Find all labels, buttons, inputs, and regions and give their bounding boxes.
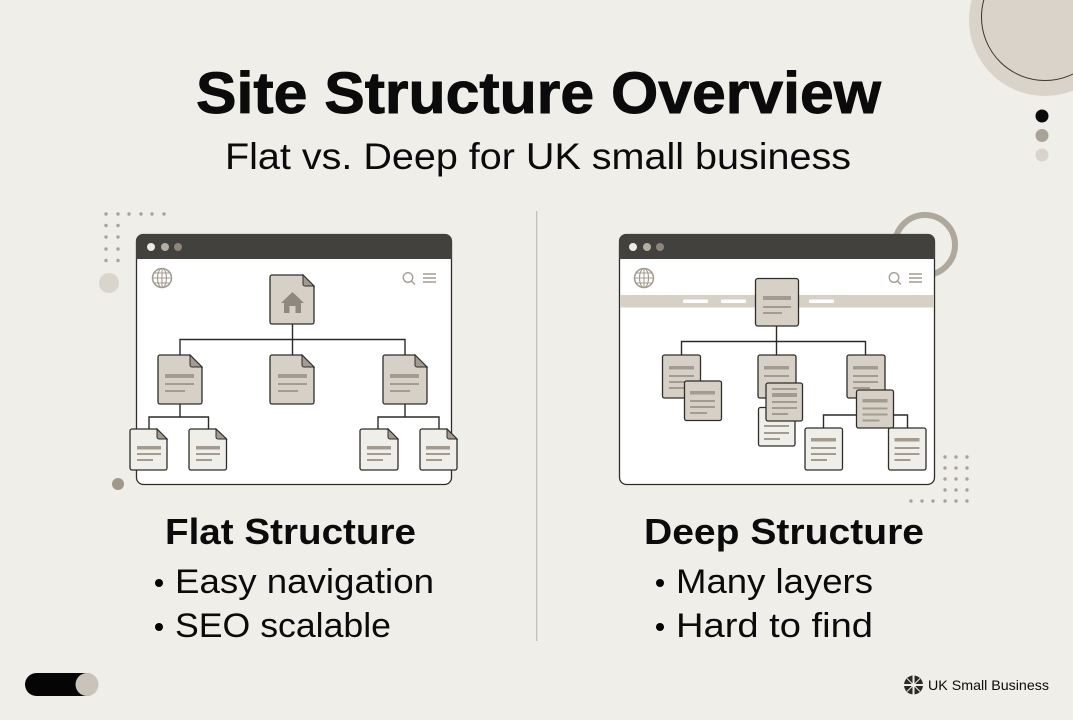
decorative ring right bbox=[895, 215, 955, 275]
icon: union flag badge bbox=[904, 676, 923, 694]
level 3 page left bbox=[805, 428, 842, 470]
page group left bbox=[662, 355, 722, 420]
level 3 page 2 bbox=[189, 429, 226, 470]
brand label: UK Small Business bbox=[928, 677, 1049, 693]
level 3 page right bbox=[888, 428, 926, 470]
navigation band bbox=[620, 295, 934, 308]
toggle switch bbox=[25, 673, 98, 696]
tree connectors bbox=[682, 326, 908, 428]
heading: deep structure: Deep Structure bbox=[644, 511, 924, 552]
panel: flat structure browser bbox=[130, 234, 457, 484]
top page bbox=[756, 278, 798, 326]
level 2 page left bbox=[158, 355, 202, 404]
level 3 page 4 bbox=[420, 429, 457, 470]
dot grid bottom right bbox=[909, 455, 969, 503]
browser window bbox=[620, 234, 934, 484]
centre divider bbox=[536, 211, 537, 641]
list: deep structure drawbacks bbox=[656, 563, 873, 645]
icon: search bbox=[403, 273, 415, 284]
subtitle: Flat vs. Deep for UK small business bbox=[225, 136, 851, 177]
decorative small circle left bbox=[112, 478, 124, 490]
decorative three dots top right bbox=[1036, 110, 1048, 162]
icon: globe bbox=[152, 268, 172, 288]
page group centre bbox=[758, 355, 802, 446]
dot grid top left bbox=[104, 212, 166, 262]
list: deep structure drawbacks: Many layers bbox=[676, 563, 873, 601]
icon: home bbox=[281, 292, 304, 313]
list: flat structure benefits: SEO scalable bbox=[175, 607, 391, 645]
list: deep structure drawbacks: Hard to find bbox=[676, 607, 873, 645]
window buttons bbox=[629, 243, 664, 251]
page group right bbox=[847, 355, 894, 428]
browser title bar bbox=[136, 234, 452, 259]
home page document bbox=[270, 275, 314, 324]
level 2 page right bbox=[383, 355, 427, 404]
icon: globe bbox=[634, 268, 654, 288]
icon: menu bbox=[423, 274, 436, 282]
icon: menu bbox=[909, 274, 922, 282]
tree connectors bbox=[149, 324, 439, 429]
heading: flat structure: Flat Structure bbox=[165, 511, 416, 552]
level 2 page centre bbox=[270, 355, 314, 404]
panel: deep structure browser bbox=[619, 234, 935, 484]
browser title bar bbox=[619, 234, 935, 259]
level 3 page 3 bbox=[360, 429, 398, 470]
level 3 page 1 bbox=[130, 429, 167, 470]
window buttons bbox=[147, 243, 182, 251]
decorative circle left bbox=[99, 273, 119, 293]
list: flat structure benefits: Easy navigation bbox=[175, 563, 434, 601]
decorative circle top right bbox=[969, 0, 1073, 96]
browser window bbox=[136, 234, 452, 484]
title: Site Structure Overview bbox=[196, 61, 882, 126]
list: flat structure benefits bbox=[155, 563, 434, 645]
icon: search bbox=[889, 273, 901, 284]
